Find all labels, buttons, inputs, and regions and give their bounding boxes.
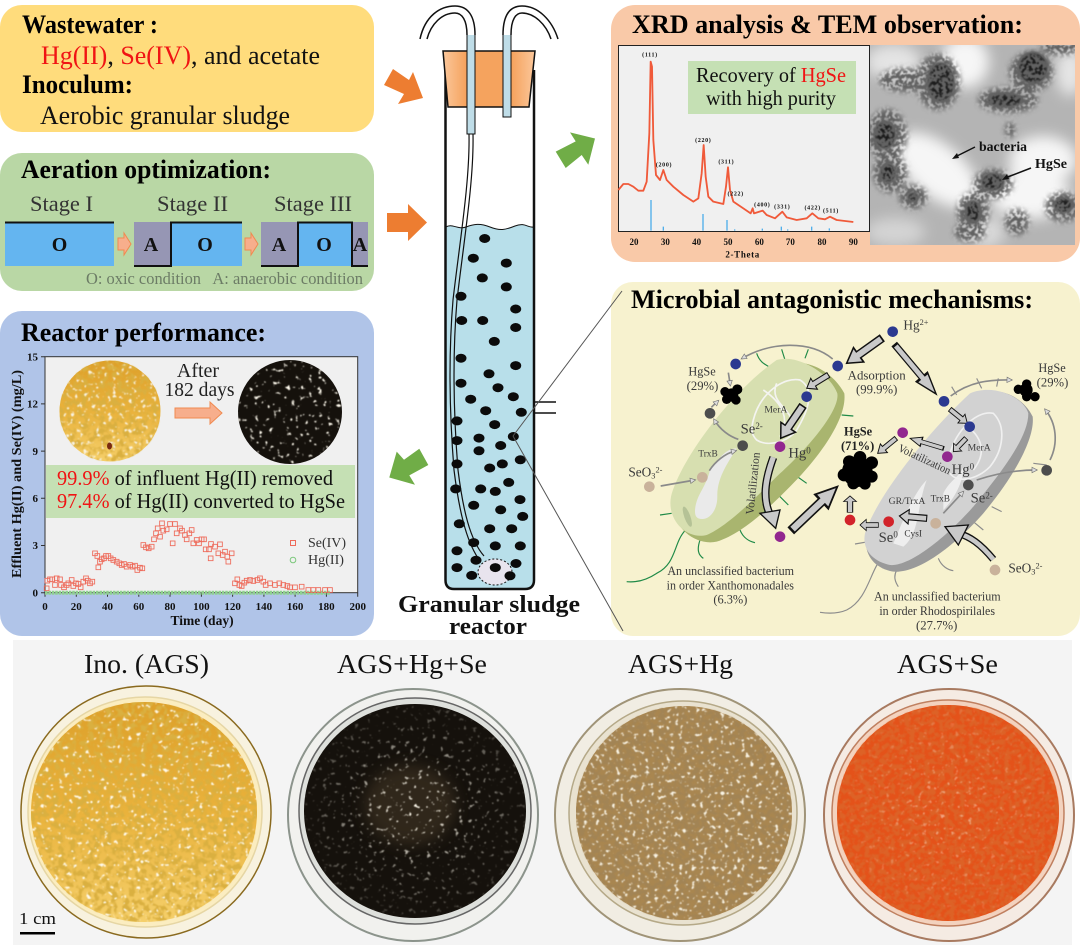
text: after 182 days: After: [177, 360, 219, 382]
mechanism labels: CysI: [904, 530, 922, 540]
plate: AGS+Se: [824, 649, 1074, 941]
y axis labels: 3: [32, 540, 38, 552]
stage labels: [30, 191, 352, 216]
text: wastewater components: Hg(II), Se(IV), and acetate: [41, 41, 320, 70]
legend: [290, 536, 346, 568]
stage III bar: [261, 222, 368, 266]
mechanism labels: 3: [1031, 567, 1035, 576]
chart: XRD pattern: (200): [656, 162, 672, 169]
photo: sludge after: [238, 360, 342, 464]
mechanism labels: Se: [971, 491, 985, 507]
heading: reactor performance: Reactor performance:: [21, 318, 266, 347]
HgSe clusters: [720, 379, 1040, 490]
mechanism labels: MerA: [968, 442, 991, 453]
stage labels: Stage II: [157, 191, 228, 216]
panel: petri dish photos: [13, 640, 1074, 945]
mechanism labels: An unclassified bacterium: [667, 564, 794, 578]
scale bar: [19, 909, 56, 934]
photo: sludge before: [60, 360, 160, 462]
mechanism labels: 2-: [755, 421, 763, 431]
mechanism labels: An unclassified bacterium: [874, 590, 1001, 604]
mechanism labels: Adsorption: [848, 369, 906, 383]
x axis labels: 100: [193, 601, 210, 613]
mechanism labels: Se: [879, 530, 893, 546]
arrow: aeration to reactor: [387, 204, 427, 241]
callout: removal results: 97.4% of Hg(II) converted to HgSe: [57, 489, 345, 513]
chart: XRD pattern: [618, 46, 870, 260]
chart: XRD pattern: 2-Theta: [725, 250, 760, 260]
x axis title: Time (day): [170, 613, 234, 628]
mechanism labels: 2+: [920, 318, 929, 327]
panel: microbial antagonistic mechanisms: [611, 282, 1080, 636]
chart: XRD pattern: 70: [786, 237, 795, 247]
stage II bar: [134, 222, 242, 266]
chart: XRD pattern: 50: [724, 237, 733, 247]
reactor wall: [446, 70, 534, 589]
reactor water: [446, 224, 533, 588]
x axis labels: 120: [224, 601, 241, 613]
chart: XRD pattern: 80: [818, 237, 827, 247]
text: after 182 days: 182 days: [164, 379, 235, 401]
heading: microbial mechanisms: Microbial antagonistic mechanisms:: [631, 285, 1033, 314]
mechanism labels: in order Rhodospirilales: [879, 604, 995, 618]
chart: XRD pattern: (422): [805, 205, 821, 212]
reactor title: [398, 592, 580, 640]
heading: XRD and TEM: XRD analysis & TEM observation:: [632, 10, 1023, 39]
arrow: before to after: [175, 402, 222, 424]
heading: aeration optimization: Aeration optimization:: [21, 155, 271, 184]
chart: XRD pattern: (220): [695, 137, 711, 144]
callout: recovery of HgSe: [688, 61, 856, 114]
panel: XRD and TEM: [611, 5, 1080, 262]
reactor title: Granular sludge: [398, 592, 580, 618]
mechanism labels: 2-: [985, 490, 993, 500]
x axis labels: 20: [71, 601, 82, 613]
block arrows: [760, 331, 993, 559]
y axis title: Effluent Hg(II) and Se(IV) (mg/L): [10, 370, 25, 578]
mechanism labels: HgSe: [1038, 361, 1066, 375]
series: Hg(II): [45, 591, 330, 595]
outlet tube: [503, 6, 558, 117]
panel: reactor performance: [0, 311, 374, 636]
plate: inoculum: [21, 649, 271, 938]
mechanism labels: Volatilization: [896, 443, 953, 477]
mechanism labels: (71%): [841, 439, 874, 453]
mechanism labels: Volatilization: [743, 451, 763, 515]
reactor title: reactor: [449, 614, 527, 640]
mechanism labels: Hg: [952, 462, 970, 478]
mechanism labels: (6.3%): [713, 593, 747, 607]
x axis labels: 140: [256, 601, 273, 613]
label: HgSe: [1002, 157, 1067, 180]
mechanism labels: [628, 317, 1068, 633]
photo: TEM micrograph: [865, 36, 1080, 248]
mechanism labels: (29%): [687, 379, 718, 393]
y axis labels: 0: [32, 588, 38, 600]
plate: inoculum: Ino. (AGS): [84, 649, 209, 679]
water surface: [446, 224, 533, 230]
mechanism labels: TrxB: [698, 450, 718, 460]
chart: XRD pattern: (311): [718, 158, 734, 165]
mechanism labels: (99.9%): [856, 383, 897, 397]
text: after 182 days: [164, 360, 235, 401]
mechanism labels: 2-: [655, 465, 663, 474]
legend: Hg(II): [308, 553, 344, 568]
arrow: wastewater to reactor: [384, 69, 423, 104]
granules: [450, 234, 528, 580]
y axis labels: 9: [32, 446, 38, 458]
plate: AGS+Se: AGS+Se: [897, 649, 998, 679]
series: Se(IV): [47, 523, 330, 590]
bacterium: Rhodospirilales: [820, 378, 1047, 613]
x axis labels: 160: [287, 601, 304, 613]
chart: XRD pattern: 60: [755, 237, 764, 247]
mechanism labels: Se: [741, 421, 755, 437]
mechanism labels: HgSe: [844, 424, 873, 438]
mechanism labels: SeO: [1008, 561, 1031, 576]
heading: wastewater: Wastewater :: [22, 10, 158, 39]
chart: XRD pattern: 90: [849, 237, 858, 247]
x axis labels: [42, 601, 366, 613]
heading: inoculum: Inoculum:: [22, 70, 133, 99]
arrow: reactor to XRD: [556, 132, 595, 168]
mechanism labels: 2-: [1035, 561, 1043, 570]
panel: wastewater and inoculum: [0, 5, 374, 132]
callout: recovery of HgSe: with high purity: [706, 86, 836, 110]
chart: XRD pattern: (111): [642, 52, 658, 59]
mechanism labels: in order Xanthomonadales: [667, 578, 794, 592]
mechanism labels: (27.7%): [916, 619, 957, 633]
stage II bar: A: [144, 234, 159, 256]
stage II bar: O: [197, 234, 213, 256]
mechanism labels: GR/TrxA: [889, 497, 926, 507]
stage I bar: O: [52, 234, 67, 256]
stage I bar: [5, 222, 114, 266]
scale bar: 1 cm: [19, 909, 56, 928]
mechanism labels: SeO: [628, 465, 651, 480]
mechanism labels: 0: [893, 530, 898, 540]
mechanism labels: TrxB: [931, 495, 950, 505]
plate: AGS+Hg: [555, 649, 805, 941]
plate: AGS+Hg: AGS+Hg: [628, 649, 733, 679]
thin transport arrows: [661, 345, 1055, 513]
callout: removal results: 99.9% of influent Hg(II) removed: [57, 466, 333, 490]
zoom lines to mechanism panel: [513, 291, 623, 631]
arrow: stage II to III: [245, 233, 258, 255]
air diffuser: [478, 559, 512, 585]
mechanism labels: 0: [806, 445, 811, 455]
x axis labels: 40: [102, 601, 114, 613]
mechanism labels: Hg: [788, 446, 806, 462]
chart: XRD pattern: (222): [728, 191, 744, 198]
chart: XRD pattern: 20: [630, 237, 639, 247]
mechanism labels: (29%): [1037, 375, 1068, 389]
chart: XRD pattern: 40: [692, 237, 702, 247]
stage III bar: O: [316, 234, 332, 256]
plate: AGS+Hg+Se: [288, 649, 538, 941]
chart: effluent concentration: [10, 352, 366, 628]
y axis labels: [27, 352, 38, 600]
arrow: stage I to II: [118, 233, 131, 255]
x axis labels: 200: [349, 601, 366, 613]
ion dots: [644, 326, 1052, 575]
stopper: [443, 51, 535, 107]
reactor: granular sludge column: [398, 6, 623, 640]
x axis labels: 180: [318, 601, 335, 613]
x axis labels: 60: [133, 601, 145, 613]
chart: XRD pattern: (400): [754, 201, 770, 208]
mechanism labels: MerA: [764, 405, 787, 416]
y axis labels: 15: [27, 352, 38, 364]
x axis labels: 80: [164, 601, 176, 613]
legend: Se(IV): [308, 536, 346, 551]
arrow: reactor to performance: [389, 449, 428, 485]
stage III bar: A: [353, 234, 368, 256]
mechanism labels: 0: [970, 462, 975, 472]
label: bacteria: [952, 140, 1027, 159]
stage III bar: A: [272, 234, 287, 256]
callout: recovery of HgSe: Recovery of HgSe: [696, 63, 846, 87]
bacterium: Xanthomonadales: [627, 349, 853, 582]
text: inoculum type: Aerobic granular sludge: [40, 101, 290, 130]
label: HgSe: HgSe: [1035, 157, 1067, 172]
label: bacteria: bacteria: [979, 140, 1027, 155]
x axis labels: 0: [42, 601, 48, 613]
side port: [534, 402, 556, 413]
stage labels: Stage I: [30, 191, 93, 216]
y axis labels: 6: [32, 493, 38, 505]
y axis labels: 12: [27, 398, 38, 410]
chart: XRD pattern: (331): [774, 204, 790, 211]
mechanism labels: Hg: [903, 317, 920, 332]
plate: AGS+Hg+Se: AGS+Hg+Se: [337, 649, 487, 679]
callout: removal results: [46, 465, 355, 518]
mechanism labels: 3: [651, 471, 655, 480]
inlet tube: [420, 6, 484, 558]
chart: XRD pattern: (511): [823, 208, 839, 215]
stage labels: Stage III: [274, 191, 352, 216]
chart: XRD pattern: 30: [661, 237, 670, 247]
mechanism labels: HgSe: [688, 364, 716, 378]
panel: aeration optimization: [0, 153, 374, 291]
legend: O: oxic condition A: anaerobic condition: [86, 269, 363, 288]
